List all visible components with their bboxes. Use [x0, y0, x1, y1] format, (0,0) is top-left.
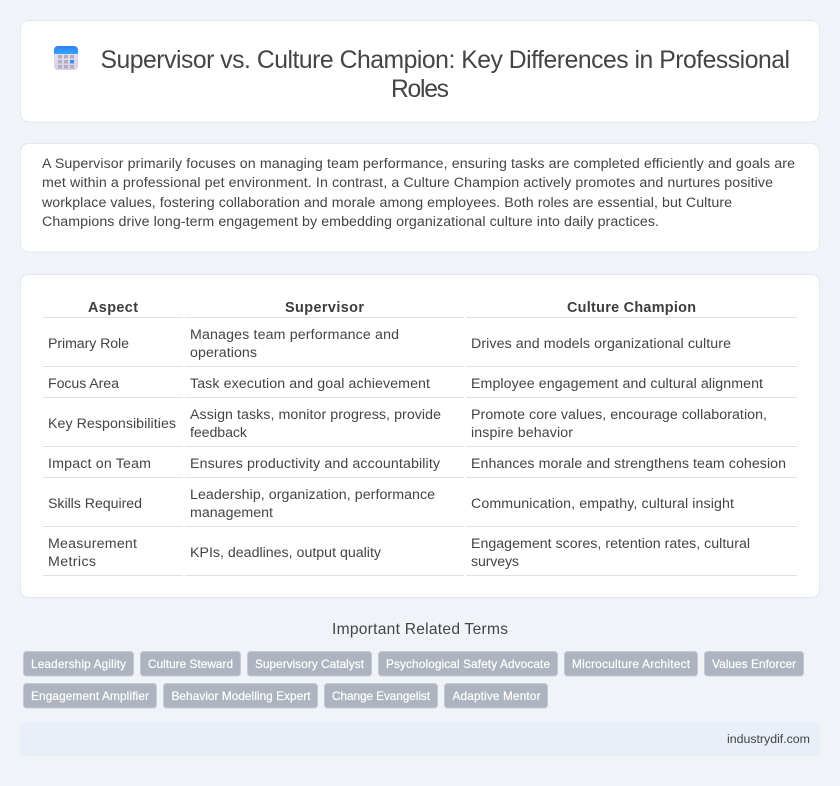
row: primary role [48, 327, 731, 361]
row: skills required [48, 487, 734, 521]
tag [378, 652, 558, 676]
row: primary role: Drives and models organizational culture [471, 336, 731, 352]
table header row: Supervisor [285, 300, 364, 316]
row: key responsibilities: Assign tasks, monitor progress, provide [190, 407, 441, 423]
row: focus area [48, 376, 763, 392]
row: skills required: Skills Required [48, 496, 142, 512]
row: skills required: management [190, 505, 273, 521]
row: focus area: Task execution and goal achievement [190, 376, 430, 392]
tag [24, 684, 156, 708]
text block: summary: workplace values, fostering collaboration and morale among employees. Both roles are essential, but Culture [41, 195, 732, 211]
text block: summary: A Supervisor primarily focuses on managing team performance, ensuring tasks are completed efficiently and goals are [42, 156, 795, 172]
row: primary role: Manages team performance and [190, 327, 399, 343]
tag [164, 684, 318, 708]
row: key responsibilities: Promote core values, encourage collaboration, [471, 407, 767, 423]
title: Roles [391, 76, 449, 103]
table header row [88, 300, 696, 316]
row: impact on team: Ensures productivity and accountability [190, 456, 441, 472]
footer text: industrydif.com [727, 732, 810, 746]
tag: Values Enforcer [712, 657, 796, 671]
row: focus area: Focus Area [48, 376, 119, 392]
title: Supervisor vs. Culture Champion: Key Differences in Professional [100, 47, 790, 74]
heading: important related terms: Important Related Terms [332, 621, 508, 638]
tag [324, 684, 438, 708]
tag [444, 684, 548, 708]
text block: summary [41, 156, 795, 230]
panel: related term tags [24, 652, 804, 708]
tag [704, 652, 804, 676]
row: skills required: Leadership, organization, performance [190, 487, 435, 503]
title [100, 47, 790, 103]
tag: Behavior Modelling Expert [172, 689, 311, 703]
row: primary role: Primary Role [48, 336, 129, 352]
table header row: Culture Champion [567, 300, 696, 316]
tag [248, 652, 372, 676]
row: impact on team: Impact on Team [48, 456, 151, 472]
row: measurement metrics: KPIs, deadlines, output quality [190, 545, 382, 561]
tag: Psychological Safety Advocate [386, 657, 550, 671]
text block: summary: Champions drive long-term engagement by embedding organizational culture into daily practices. [42, 214, 659, 230]
row: measurement metrics: Measurement [48, 536, 137, 552]
tag: Engagement Amplifier [31, 689, 149, 703]
row: skills required: Communication, empathy, cultural insight [471, 496, 734, 512]
row: primary role: operations [190, 345, 257, 361]
row: measurement metrics: Engagement scores, retention rates, cultural [471, 536, 750, 552]
panel: comparison table [20, 274, 820, 598]
row: measurement metrics: Metrics [48, 554, 96, 570]
tag: Leadership Agility [31, 657, 126, 671]
tag [24, 652, 134, 676]
row: impact on team [48, 456, 786, 472]
row: focus area: Employee engagement and cultural alignment [471, 376, 763, 392]
panel: summary paragraph [20, 144, 820, 252]
row: key responsibilities [48, 407, 767, 441]
table header row: Aspect [88, 300, 138, 316]
row: measurement metrics [48, 536, 750, 570]
panel: header [20, 20, 820, 122]
row: measurement metrics: surveys [471, 554, 519, 570]
footer bar [20, 722, 820, 756]
tag: Culture Steward [148, 657, 233, 671]
text block: summary: met within a professional pet environment. In contrast, a Culture Champion actively promotes and nurtures positive [42, 175, 773, 191]
tag: Adaptive Mentor [452, 689, 541, 703]
tag: Microculture Architect [572, 657, 691, 671]
icon: calendar [54, 46, 78, 70]
tag [140, 652, 240, 676]
table rules [43, 317, 797, 576]
tag: Supervisory Catalyst [255, 657, 365, 671]
row: key responsibilities: Key Responsibilities [48, 416, 176, 432]
row: impact on team: Enhances morale and strengthens team cohesion [471, 456, 786, 472]
row: key responsibilities: feedback [190, 425, 248, 441]
tag: Change Evangelist [332, 689, 431, 703]
tag [564, 652, 698, 676]
row: key responsibilities: inspire behavior [471, 425, 573, 441]
